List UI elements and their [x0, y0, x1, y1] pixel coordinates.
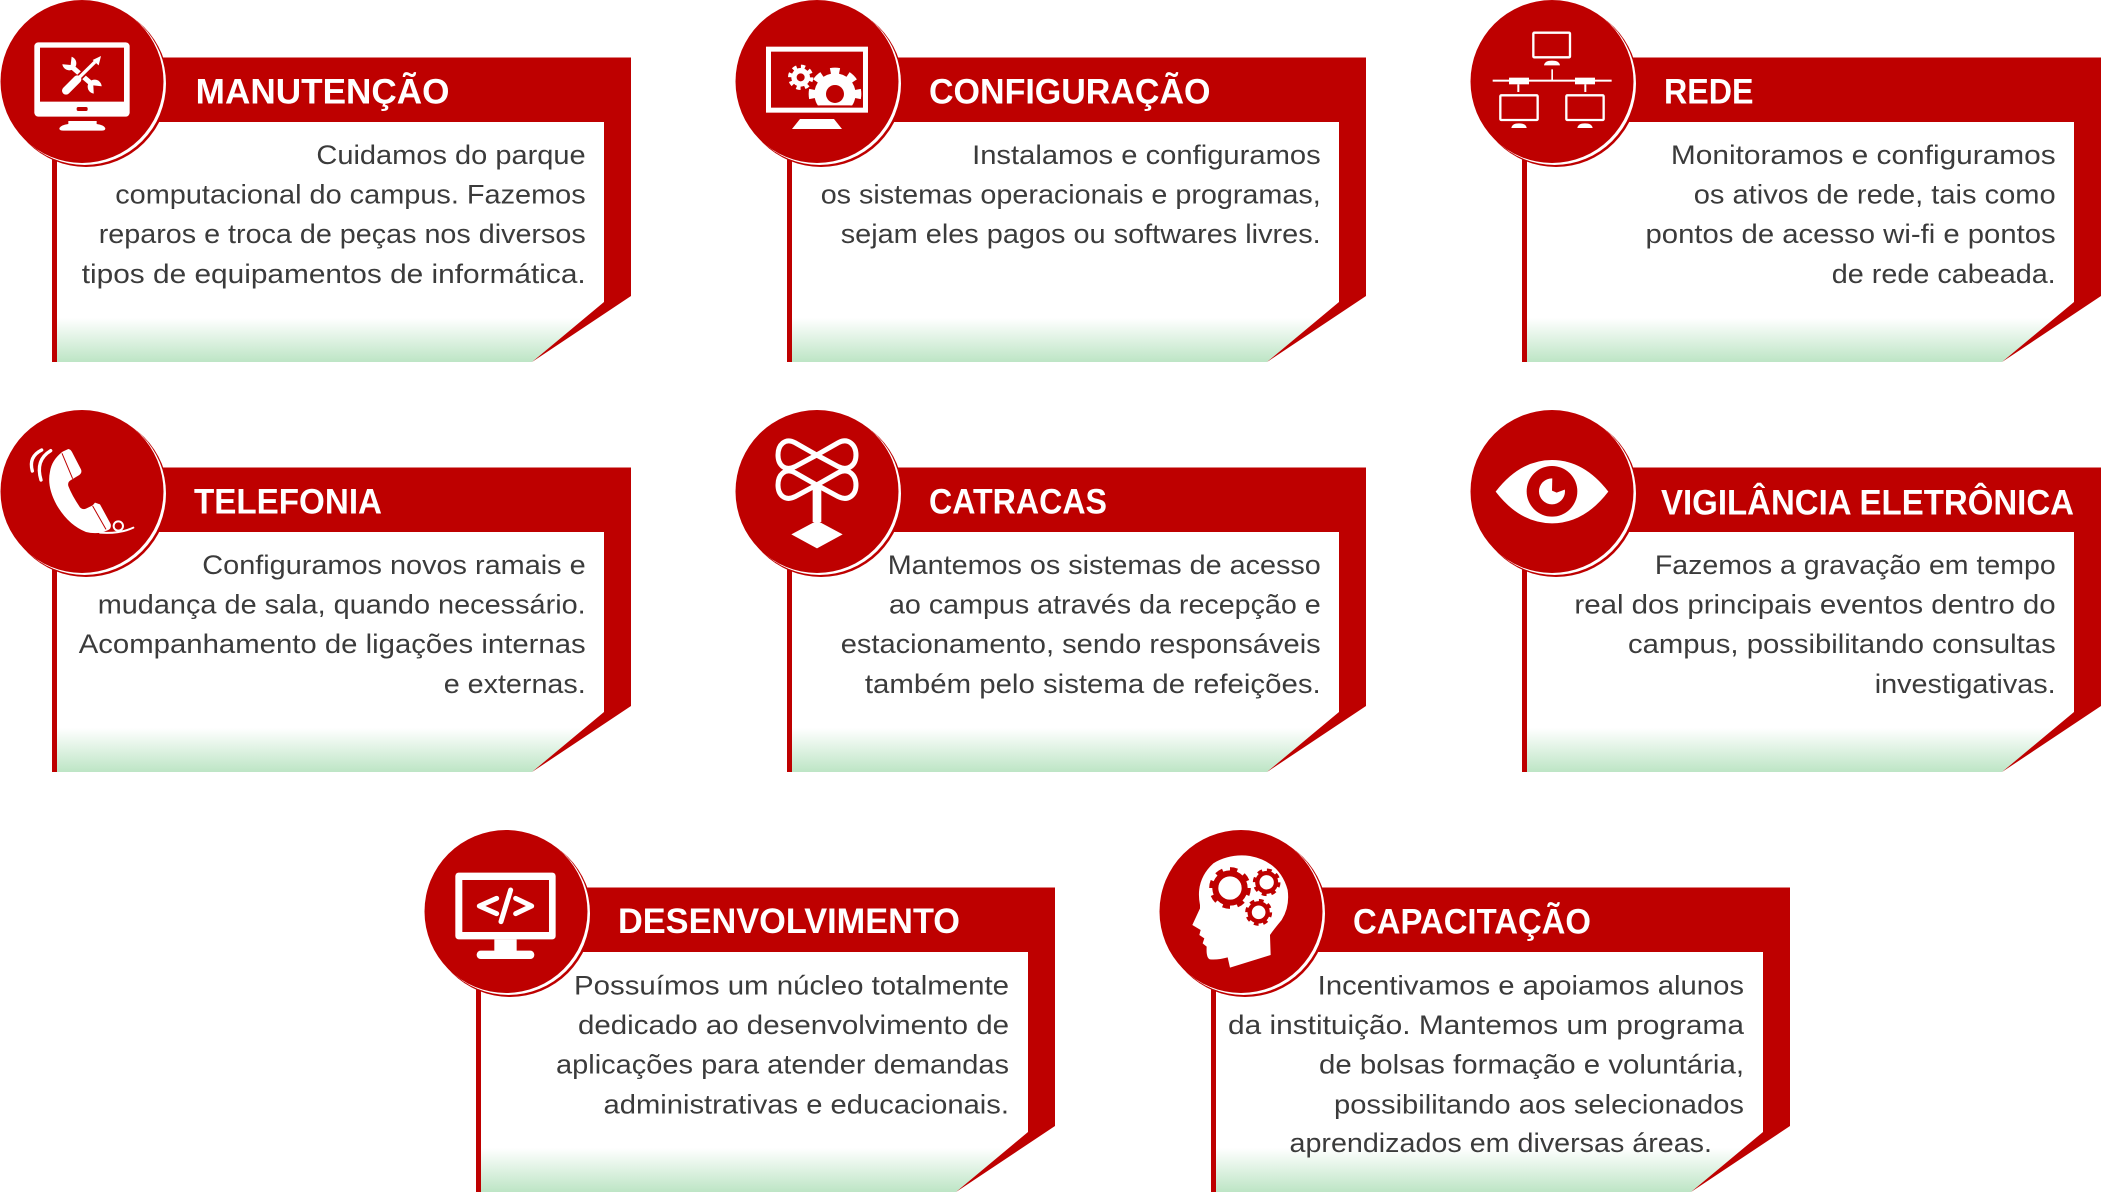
title: REDE [1664, 72, 1754, 112]
description text: campus, possibilitando consultas [1628, 629, 2056, 659]
description text: Instalamos e configuramos [972, 140, 1321, 170]
panel: telefonia [0, 410, 631, 772]
card frame [1522, 58, 2101, 362]
title: CAPACITAÇÃO [1353, 902, 1591, 942]
description text: possibilitando aos selecionados [1334, 1090, 1744, 1120]
description text: Fazemos a gravação em tempo [1655, 550, 2056, 580]
icon badge circle [736, 0, 903, 167]
description text: os sistemas operacionais e programas, [821, 180, 1321, 210]
description text: Configuramos novos ramais e [202, 550, 586, 580]
icon: network [1493, 33, 1612, 128]
description text: Monitoramos e configuramos [1671, 140, 2056, 170]
description text: Incentivamos e apoiamos alunos [1318, 970, 1744, 1000]
description text: aplicações para atender demandas [556, 1050, 1009, 1080]
description text: dedicado ao desenvolvimento de [578, 1010, 1009, 1040]
icon badge circle [736, 410, 903, 577]
card frame [787, 468, 1366, 772]
description text: de bolsas formação e voluntária, [1319, 1050, 1744, 1080]
icon: monitor with code [455, 873, 556, 959]
description text: mudança de sala, quando necessário. [98, 590, 586, 620]
description text: pontos de acesso wi-fi e pontos [1646, 219, 2056, 249]
card frame [1522, 468, 2101, 772]
description text: Cuidamos do parque [316, 140, 586, 170]
icon badge circle [1470, 410, 1638, 577]
panel: vigilância eletrônica [1470, 410, 2101, 772]
description text: reparos e troca de peças nos diversos [99, 219, 586, 249]
description text: Acompanhamento de ligações internas [79, 629, 586, 659]
description text: aprendizados em diversas áreas. [1290, 1128, 1712, 1158]
panel: catracas [736, 410, 1366, 772]
title: MANUTENÇÃO [196, 72, 450, 112]
description text [1646, 140, 2056, 289]
card frame [52, 58, 631, 362]
description text: estacionamento, sendo responsáveis [841, 629, 1321, 659]
icon badge circle [1470, 0, 1638, 167]
description text: Possuímos um núcleo totalmente [574, 970, 1009, 1000]
icon: head with gears [1192, 855, 1288, 968]
description text [556, 970, 1009, 1120]
description text: e externas. [444, 669, 586, 699]
description text: também pelo sistema de refeições. [865, 669, 1321, 699]
description text: Mantemos os sistemas de acesso [888, 550, 1321, 580]
icon badge circle [0, 0, 168, 167]
icon badge circle [424, 830, 592, 997]
description text [1574, 550, 2056, 699]
icon badge circle [1160, 830, 1327, 997]
icon: eye [1496, 460, 1608, 523]
description text: sejam eles pagos ou softwares livres. [841, 219, 1321, 249]
title: CONFIGURAÇÃO [929, 72, 1210, 112]
card frame [52, 468, 631, 772]
card frame [1211, 888, 1790, 1192]
description text: da instituição. Mantemos um programa [1228, 1010, 1745, 1040]
card frame [476, 888, 1055, 1192]
icon: monitor with tools [34, 42, 130, 131]
title: DESENVOLVIMENTO [618, 902, 960, 941]
title: TELEFONIA [194, 482, 382, 522]
description text [821, 140, 1321, 249]
title: VIGILÂNCIA ELETRÔNICA [1661, 483, 2074, 523]
description text: tipos de equipamentos de informática. [82, 259, 586, 289]
description text [82, 140, 586, 289]
description text [841, 550, 1321, 699]
title: CATRACAS [929, 482, 1107, 522]
panel: capacitação [1160, 830, 1790, 1192]
icon: telephone [31, 449, 133, 533]
panel: manutenção [0, 0, 631, 362]
icon badge circle [0, 410, 168, 577]
description text: investigativas. [1875, 669, 2056, 699]
description text: ao campus através da recepção e [889, 590, 1321, 620]
panel: rede [1470, 0, 2101, 362]
description text: os ativos de rede, tais como [1694, 180, 2056, 210]
icon: monitor with gears [768, 49, 865, 129]
panel: desenvolvimento [424, 830, 1055, 1192]
description text: computacional do campus. Fazemos [115, 180, 586, 210]
description text [79, 550, 586, 699]
card frame [787, 58, 1366, 362]
icon: turnstile [778, 441, 856, 548]
description text: de rede cabeada. [1832, 259, 2056, 289]
description text: real dos principais eventos dentro do [1574, 590, 2056, 620]
panel: configuração [736, 0, 1366, 362]
description text: administrativas e educacionais. [604, 1090, 1009, 1120]
description text [1228, 970, 1745, 1158]
